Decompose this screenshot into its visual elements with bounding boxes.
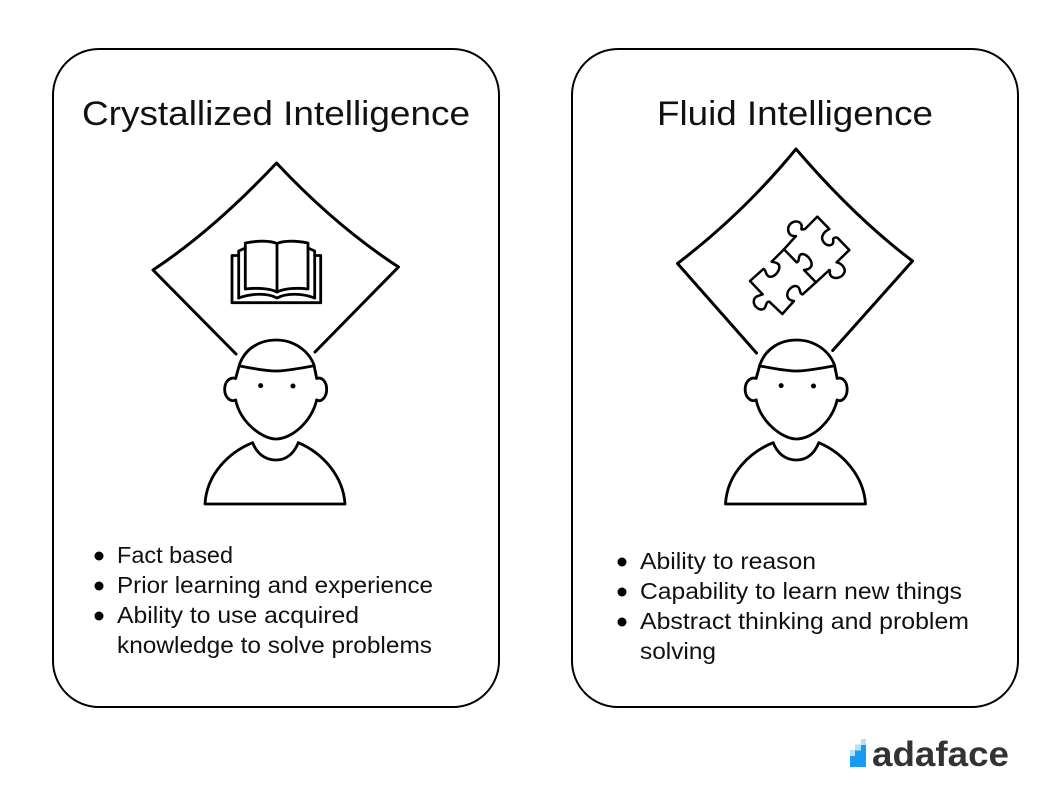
icon: person [725,340,865,504]
bullet list: crystallized traits: Ability to use acquired [117,602,359,628]
bullet list: fluid traits: Ability to reason [640,548,816,574]
bullet list: crystallized traits: Prior learning and experience [117,572,433,598]
icon: puzzle pieces [750,217,849,314]
bullet list: fluid traits: Abstract thinking and problem [640,608,969,634]
wordmark: adaface [872,735,1009,774]
heading: crystallized intelligence: Crystallized Intelligence [82,95,470,133]
panel: fluid intelligence [572,49,1018,707]
bullet list: crystallized traits: knowledge to solve problems [117,632,432,658]
icon: person [205,340,345,504]
logo: adaface [850,735,1009,774]
bullet list: fluid traits [618,548,969,664]
thought diamond: crystallized [153,163,398,354]
bullet list: fluid traits: solving [640,638,716,664]
panel: crystallized intelligence [53,49,499,707]
bullet list: fluid traits: Capability to learn new things [640,578,962,604]
icon: open book [232,241,321,303]
icon: adaface stairs [850,739,866,767]
heading: fluid intelligence: Fluid Intelligence [657,95,933,133]
thought diamond: fluid [678,149,912,353]
bullet list: crystallized traits: Fact based [117,542,233,568]
bullet list: crystallized traits [94,542,433,658]
